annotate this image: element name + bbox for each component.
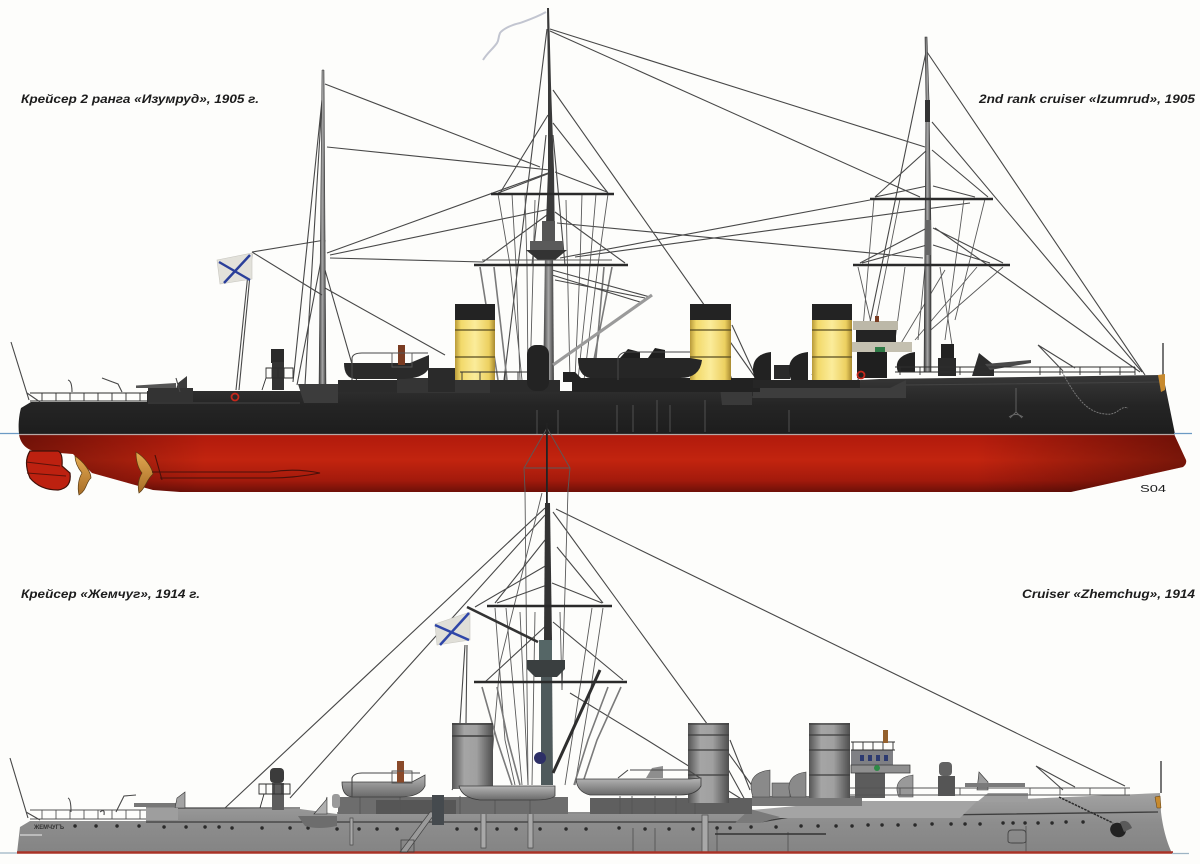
- heading: English title of Zhemchug: Cruiser «Zhemchug», 1914: [1022, 587, 1195, 601]
- boat: middle grey lifeboat: [459, 786, 555, 800]
- bridge: forward bridge: [852, 316, 912, 378]
- boom: boat derrick: [553, 295, 652, 365]
- boat: aft black lifeboat: [344, 345, 429, 380]
- heading: Russian title of Zhemchug: Крейсер «Жемчуг», 1914 г.: [21, 587, 200, 601]
- ventilators: forward cowls: [753, 352, 915, 380]
- life ring on hull: [232, 394, 238, 400]
- superstructure: midship deckhouse: [338, 795, 862, 852]
- boom: lower derrick: [553, 670, 600, 773]
- rigging: Zhemchug stays and shrouds: [225, 428, 1125, 808]
- ventilators: forward cowls: [751, 770, 913, 797]
- boat: forward black lifeboat: [578, 348, 702, 380]
- searchlight: forward platform: [938, 344, 956, 376]
- boat: aft grey lifeboat: [342, 761, 425, 797]
- propeller: aft: [75, 456, 91, 495]
- mast: fore mast: [853, 37, 1010, 372]
- funnel: second yellow funnel: [690, 304, 731, 380]
- rigging: Izumrud stays and shrouds: [236, 29, 1145, 390]
- funnel: second grey funnel: [688, 723, 729, 803]
- hull: underwater red hull: [19, 434, 1186, 492]
- hull: black topside: [19, 375, 1175, 434]
- propeller shaft: [152, 455, 320, 480]
- gun: forward gun: [972, 353, 1031, 376]
- stern details: flagstaff and davits: [10, 758, 136, 820]
- funnel: third yellow funnel: [812, 304, 852, 380]
- funnel: first grey funnel: [452, 723, 493, 789]
- anchor chain: [1062, 372, 1128, 414]
- mast: upper pole over red hull: [546, 423, 548, 503]
- waterline: blue marks: [0, 432, 1192, 434]
- mast: aft mast: [319, 70, 326, 385]
- searchlight: aft platform: [259, 768, 290, 810]
- funnel: third grey funnel: [809, 723, 850, 798]
- mast: main mast: [474, 8, 628, 392]
- searchlight: aft platform: [262, 349, 293, 390]
- bow details: crane and jackstaff: [1038, 343, 1165, 392]
- bow details: crane and jackstaff: [1036, 761, 1161, 808]
- flag: gaff: [252, 252, 322, 295]
- ship name on stern: ЖЕМЧУГЪ: [33, 825, 64, 831]
- portholes: hull port row: [75, 822, 1083, 829]
- mast: main mast: [474, 503, 627, 785]
- gun: forward gun: [965, 772, 1028, 802]
- flag: St Andrew ensign: [217, 253, 252, 284]
- boat: forward grey lifeboat: [576, 766, 701, 795]
- flag: St Andrew ensign: [435, 612, 470, 645]
- hull: grey topside: [17, 793, 1172, 853]
- funnel: first yellow funnel: [455, 304, 495, 380]
- boom anchor detail: [1009, 388, 1023, 418]
- waterline: [19, 434, 1175, 436]
- searchlight: forward platform: [938, 762, 955, 796]
- propeller: forward: [136, 452, 153, 493]
- waterline: red boot topping: [17, 851, 1173, 854]
- rudder: [26, 451, 70, 490]
- boom: upper derrick: [467, 607, 538, 642]
- anchor and chain: [1059, 797, 1132, 840]
- gun: aft gun: [136, 376, 193, 402]
- gun: aft gun: [134, 792, 185, 820]
- waterline: blue marks: [0, 852, 1189, 854]
- ship: cruiser Zhemchug 1914: [0, 423, 1189, 854]
- superstructure: midship deckhouse: [338, 345, 860, 393]
- searchlight: main mast: [534, 752, 546, 764]
- flag: pennant on main mast: [483, 12, 546, 60]
- rails: deck railings: [30, 367, 1135, 401]
- stern details: flagstaff and davits: [11, 342, 180, 402]
- bridge: forward bridge: [851, 730, 910, 798]
- ship: cruiser Izumrud 1905: [0, 8, 1192, 495]
- gun: midship gun: [298, 794, 340, 828]
- heading: Russian title of Izumrud: Крейсер 2 ранга «Изумруд», 1905 г.: [21, 92, 259, 106]
- heading: English title of Izumrud: 2nd rank cruiser «Izumrud», 1905: [978, 92, 1195, 106]
- signature: S04: [1140, 484, 1167, 495]
- rails: deck railings: [30, 788, 1130, 819]
